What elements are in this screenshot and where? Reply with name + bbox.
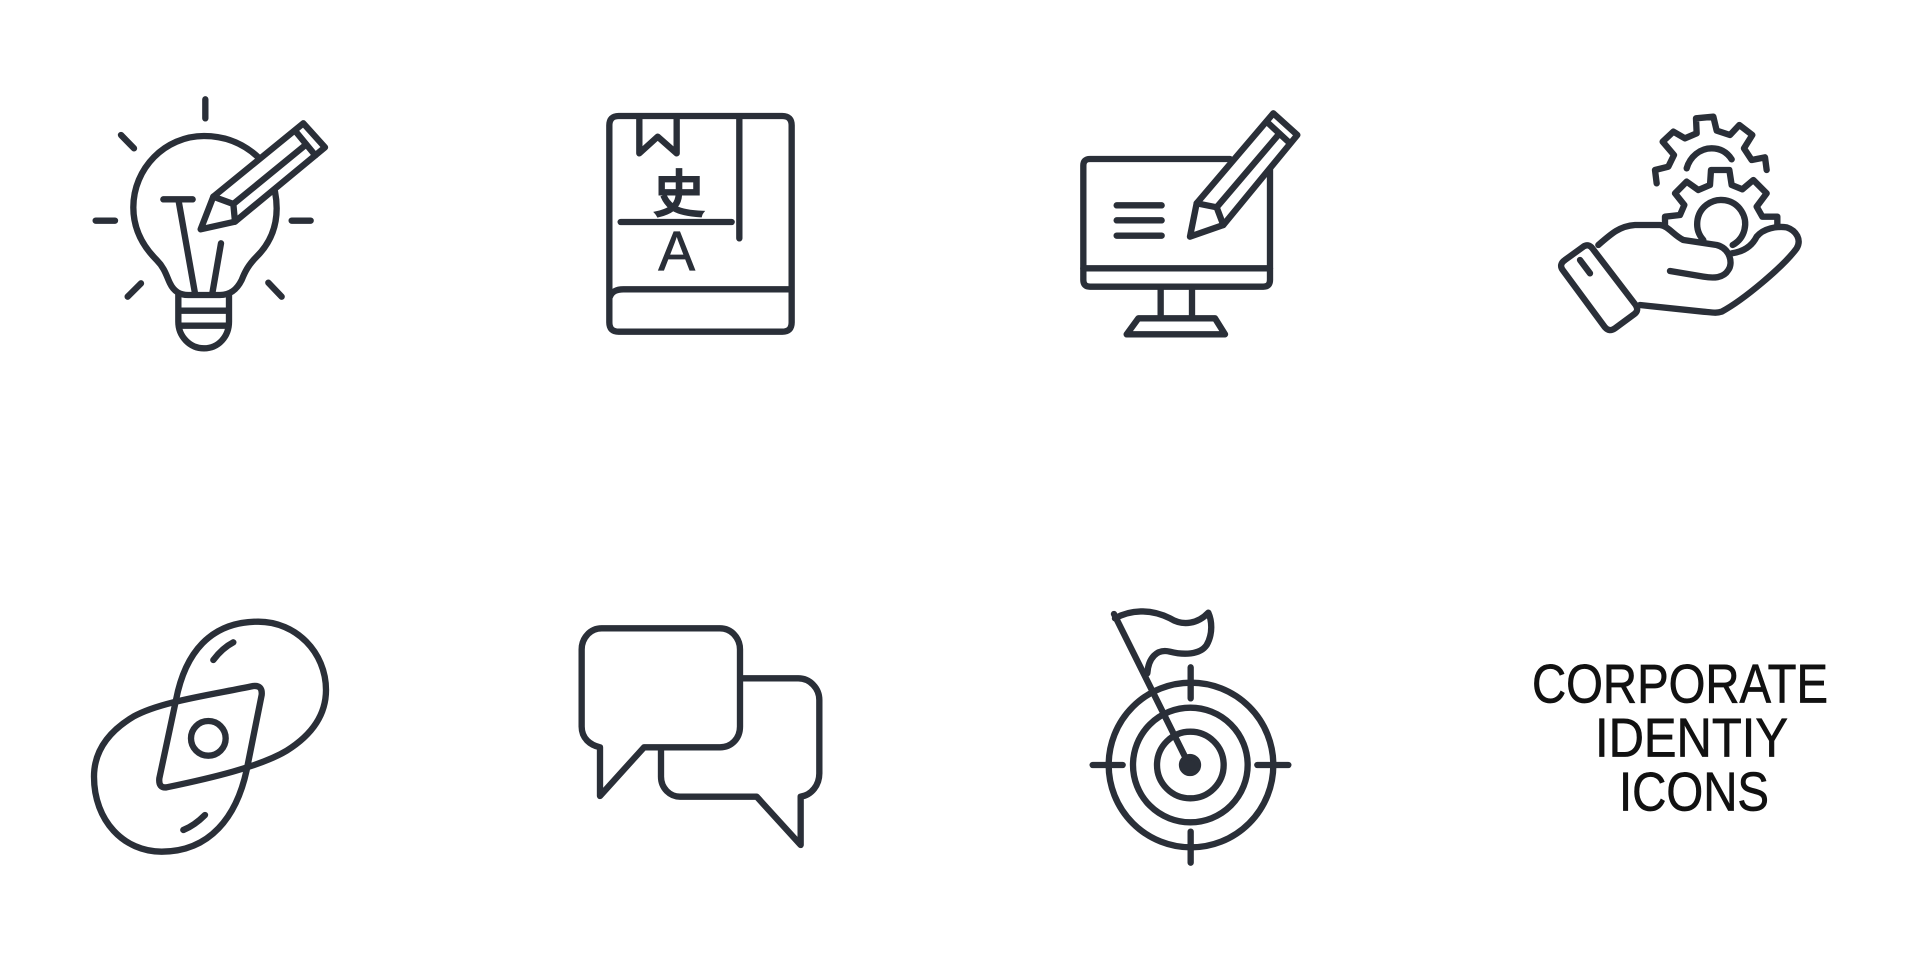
icon: monitor with pencil bbox=[1083, 113, 1297, 334]
icon: hand holding gears bbox=[1561, 117, 1799, 330]
glyph: chinese character: 史 bbox=[654, 166, 704, 223]
icon: target with flag bbox=[1093, 611, 1288, 863]
icon: translation dictionary book bbox=[609, 116, 792, 332]
icon: speech bubbles bbox=[582, 628, 819, 845]
glyph: latin letter: A bbox=[658, 220, 695, 282]
title: corporate identity icons bbox=[1532, 652, 1828, 822]
title: corporate identity icons: ICONS bbox=[1619, 760, 1769, 822]
title: corporate identity icons: CORPORATE bbox=[1532, 652, 1828, 714]
icon: interlocked infinity with eye bbox=[94, 622, 326, 852]
icon: light bulb with pencil bbox=[96, 99, 325, 348]
title: corporate identity icons: IDENTIY bbox=[1595, 706, 1788, 768]
